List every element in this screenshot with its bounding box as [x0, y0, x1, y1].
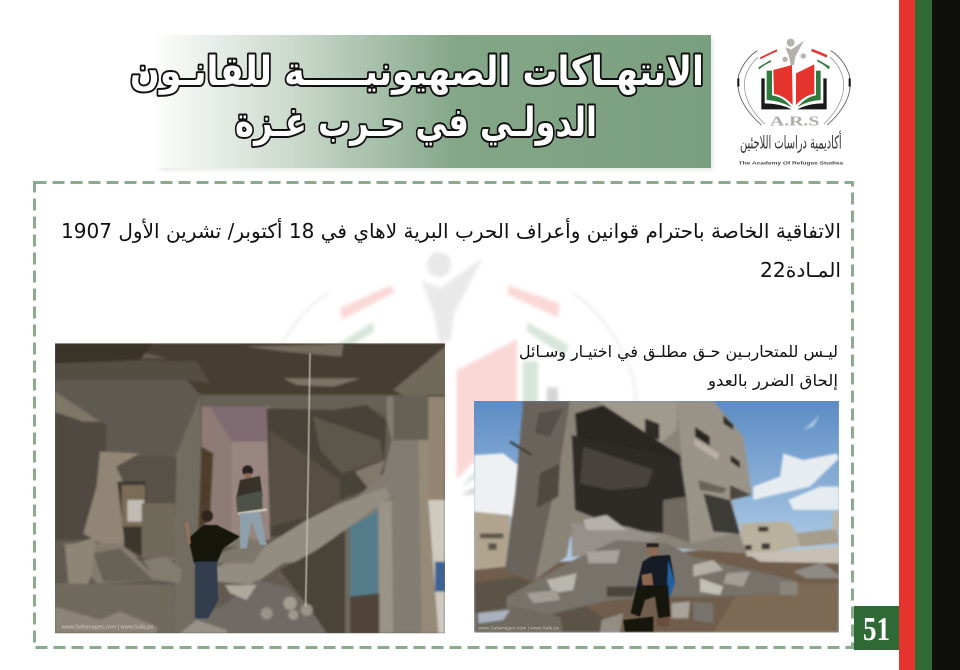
background stripe: red [899, 0, 915, 670]
hole in left wall [83, 452, 187, 560]
logo: Academy of Refugee Studies [737, 39, 851, 165]
logo caption: The Academy Of Refugee Studies [739, 160, 844, 165]
photo credit: www.Safamages.com | www.Safa.ps [61, 625, 154, 631]
man with board [242, 465, 253, 476]
inner room [202, 407, 270, 537]
photo: destroyed building with seated man [474, 401, 839, 633]
ground [474, 547, 839, 633]
building [534, 401, 746, 580]
page number box [854, 606, 899, 650]
watermark logo [265, 252, 636, 549]
pillar [173, 397, 202, 633]
caption text [519, 342, 838, 391]
heading line 2: المـادة22 [760, 258, 841, 282]
rubble pile [507, 540, 793, 617]
rope [306, 353, 310, 607]
window frame and cloth [63, 543, 160, 583]
dashed content panel [34, 182, 852, 648]
heading line 1: الاتفاقية الخاصة باحترام قوانين وأعراف الحرب البرية لاهاي في 18 أكتوبر/ تشرين الأول 1907 [61, 218, 841, 244]
clouds [474, 453, 520, 517]
background stripe: black [932, 0, 960, 670]
photo: damaged interior with two men [55, 343, 445, 633]
title line 1: الانتهـاكات الصهيونيـــــة للقانـون [130, 49, 704, 95]
windows [645, 418, 659, 440]
caption line 1: ليـس للمتحاربـين حـق مطلـق في اختيـار وسـائل [519, 342, 838, 362]
title line 2: الدولـي في حـرب غـزة [235, 100, 597, 146]
page number [854, 606, 899, 650]
man in black shirt [202, 510, 213, 522]
title banner [130, 35, 713, 170]
page number digits: 51 [863, 611, 890, 648]
logo letters: A.R.S [770, 114, 820, 129]
beam [200, 394, 426, 398]
right wall [354, 396, 422, 634]
ceiling [140, 343, 445, 396]
diagonal broken slab [217, 487, 390, 585]
foreground debris [474, 607, 563, 633]
far buildings [474, 512, 510, 570]
photo credit: www.Safamages.com | www.Safa.ps [478, 625, 560, 631]
heading text [61, 218, 841, 282]
rubble [280, 530, 345, 633]
background stripe: green [915, 0, 932, 670]
street lamp [510, 442, 532, 455]
seated man [647, 545, 659, 557]
caption line 2: إلحاق الضرر بالعدو [707, 371, 838, 391]
stair hole [267, 405, 387, 537]
lower left wall [55, 583, 173, 633]
banner gradient [150, 35, 711, 168]
banner shadow [160, 38, 713, 170]
teal door [350, 510, 378, 600]
left wall [55, 380, 202, 633]
darkening tone [55, 343, 445, 633]
collapsed cavity [575, 405, 682, 462]
logo calligraphy: أكاديمية دراسات اللاجئين [740, 131, 842, 154]
